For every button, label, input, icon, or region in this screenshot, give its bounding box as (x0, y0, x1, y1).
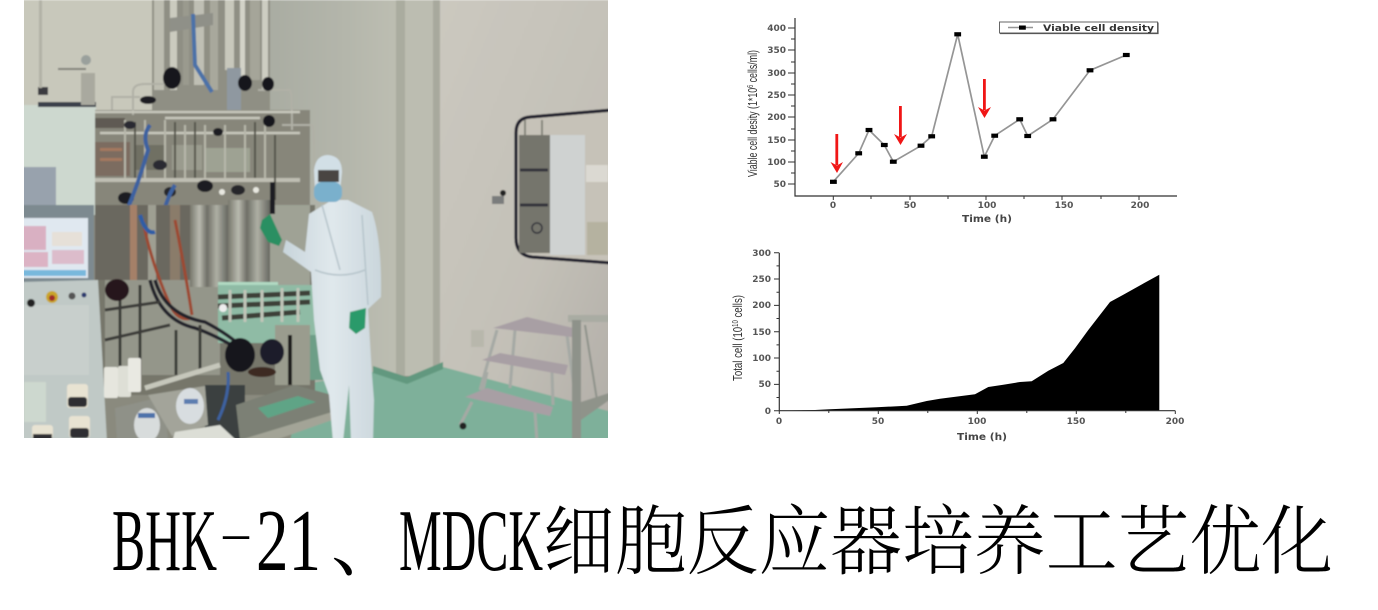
floor pumps (115, 386, 236, 442)
y tick labels: 400 (767, 24, 786, 34)
y tick labels: 250 (752, 275, 771, 285)
axis ticks (788, 28, 1139, 200)
title: 、 (331, 506, 403, 586)
y tick labels: 100 (767, 158, 786, 168)
pressure vessel on cabinet (38, 0, 95, 105)
axes (795, 18, 1177, 196)
chart: total cell area over time (730, 249, 1184, 443)
y tick labels (767, 24, 786, 190)
title: - (219, 514, 253, 554)
control panel (20, 280, 107, 442)
y axis title: cells) (730, 295, 745, 320)
y tick labels: 200 (767, 113, 786, 123)
x tick labels (776, 417, 1184, 427)
x tick labels: 200 (1166, 417, 1184, 427)
title (112, 481, 1333, 590)
red arrow 1 (830, 134, 843, 173)
legend (1000, 22, 1158, 34)
x tick labels: 150 (1055, 201, 1073, 211)
x axis title: Time (h) (957, 432, 1007, 443)
y tick labels: 50 (773, 180, 786, 190)
axis ticks (774, 253, 1175, 414)
y tick labels (752, 249, 771, 417)
x tick labels: 100 (978, 201, 996, 211)
filled area (779, 275, 1159, 411)
step ladder (460, 317, 575, 442)
y tick labels: 350 (767, 46, 786, 56)
left wall (24, 0, 153, 111)
y axis title: cells/ml) (745, 50, 760, 85)
y axis title: 6 (746, 84, 755, 88)
y tick labels: 300 (767, 69, 786, 79)
data markers (830, 32, 1130, 184)
title: MDCK (399, 493, 543, 590)
title: BHK (112, 493, 217, 590)
photo base (93, 214, 410, 438)
x tick labels: 0 (830, 201, 836, 211)
wall column (393, 0, 440, 376)
y tick labels: 150 (752, 328, 771, 338)
y tick labels: 150 (767, 136, 786, 146)
wall cabinet (20, 102, 96, 215)
peristaltic pump heads on panel (32, 384, 90, 440)
reactor body and tubing (95, 200, 324, 395)
x tick labels (830, 201, 1149, 211)
socket (472, 330, 484, 347)
y axis title: Viable cell desity (1*10 (745, 46, 760, 177)
title: 细胞反应器培养工艺优化 (543, 481, 1333, 590)
y axis title: 10 (731, 320, 740, 327)
steel table frame (568, 315, 608, 438)
y tick labels: 50 (758, 380, 771, 390)
x tick labels: 200 (1131, 201, 1149, 211)
y tick labels: 300 (752, 249, 771, 259)
x tick labels: 50 (904, 201, 916, 211)
chart: viable cell density over time (745, 18, 1177, 225)
screen (20, 205, 94, 285)
middle wall (270, 0, 400, 400)
x axis title: Time (h) (962, 214, 1012, 225)
pipework block (94, 66, 310, 206)
x tick labels: 100 (968, 417, 986, 427)
x tick labels: 0 (776, 417, 782, 427)
x tick labels: 150 (1067, 417, 1085, 427)
data line (833, 34, 1126, 182)
axes (779, 253, 1175, 411)
cleanroom window (516, 110, 612, 263)
tray and lower machine (205, 372, 332, 442)
red arrow 2 (894, 106, 907, 145)
vertical steel pipes (152, 0, 270, 118)
valve on wall (492, 190, 506, 204)
legend: Viable cell density (1043, 24, 1154, 34)
y tick labels: 0 (765, 407, 771, 417)
y tick labels: 250 (767, 91, 786, 101)
red arrow 3 (978, 79, 991, 118)
y tick labels: 200 (752, 301, 771, 311)
hose (145, 365, 220, 388)
floor (290, 362, 612, 442)
x tick labels: 50 (872, 417, 884, 427)
white bottles (104, 358, 141, 398)
right wall (440, 0, 612, 420)
photo: bioreactor room with operator (20, 0, 612, 442)
title: 21 (256, 493, 321, 590)
y tick labels: 100 (752, 354, 771, 364)
y axis title: Total cell (10 (730, 308, 745, 381)
operator in cleanroom suit (260, 155, 381, 442)
